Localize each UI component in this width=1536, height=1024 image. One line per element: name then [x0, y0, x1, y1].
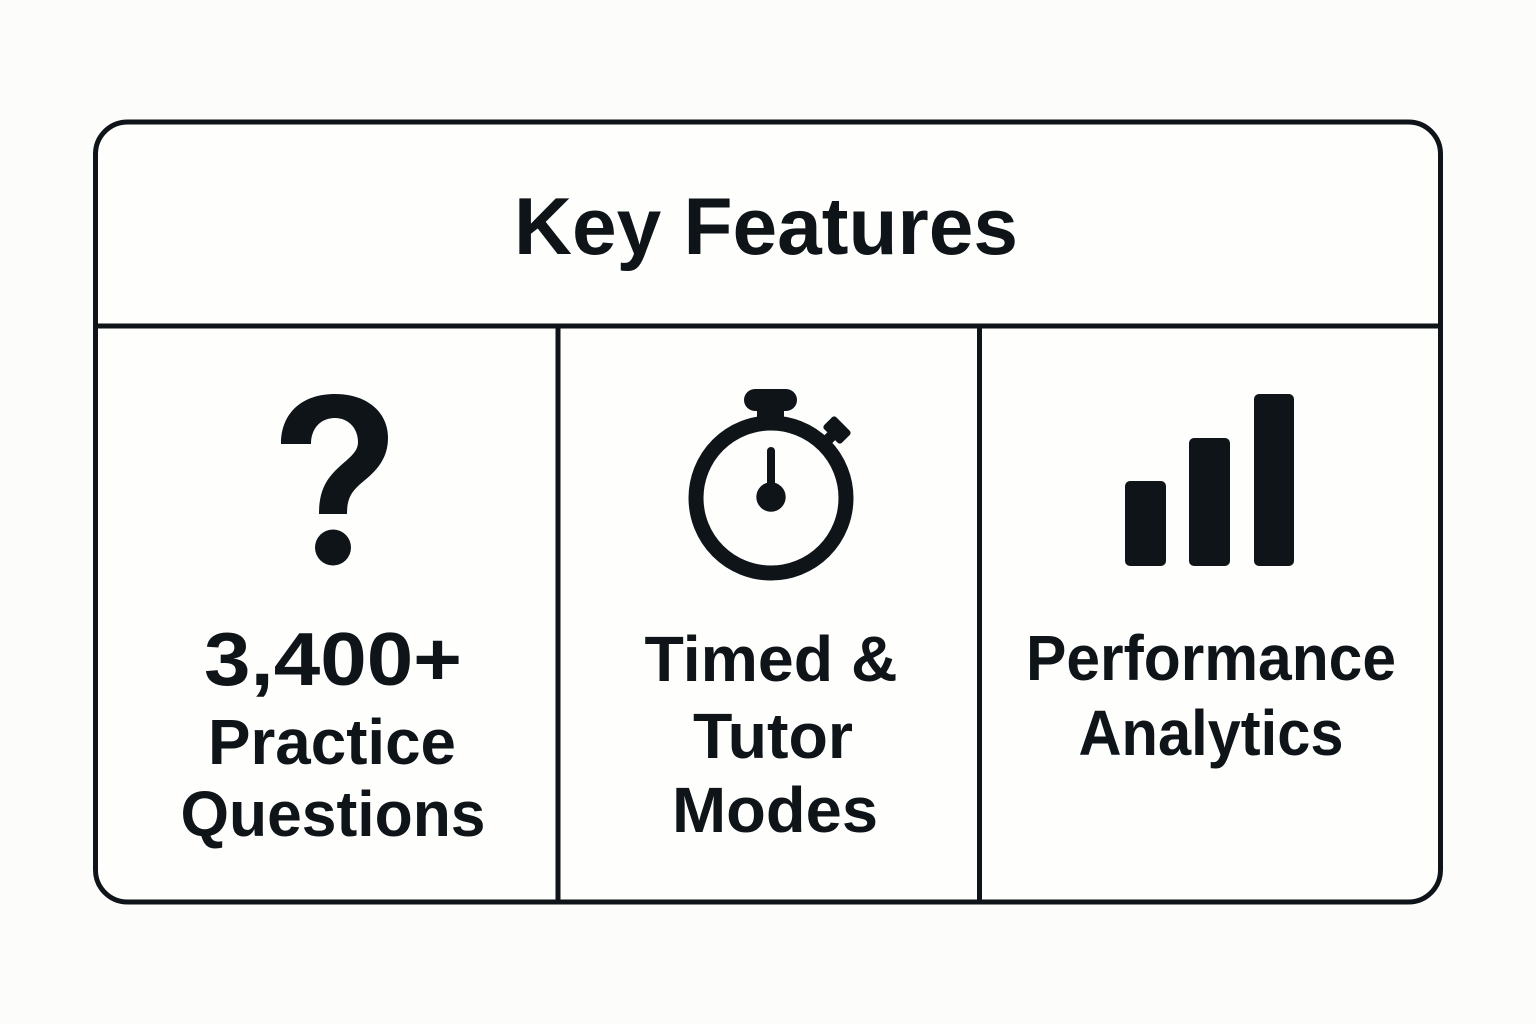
text: practice questions [180, 617, 486, 850]
text: performance analytics: Analytics [1078, 697, 1344, 769]
title: Key Features [514, 182, 1018, 272]
text: practice questions: 3,400+ [204, 617, 462, 701]
icon: question mark [281, 394, 388, 566]
text: performance analytics [1026, 622, 1396, 769]
text: timed and tutor modes: Timed & [644, 623, 898, 695]
text: timed and tutor modes: Modes [672, 774, 878, 846]
text: timed and tutor modes [644, 623, 898, 846]
text: practice questions: Questions [180, 778, 486, 850]
text: performance analytics: Performance [1026, 622, 1396, 694]
text: timed and tutor modes: Tutor [693, 700, 853, 772]
panel: key features card [96, 122, 1440, 902]
icon: bar chart [1125, 394, 1294, 566]
text: practice questions: Practice [208, 706, 456, 778]
icon: stopwatch [696, 389, 852, 573]
